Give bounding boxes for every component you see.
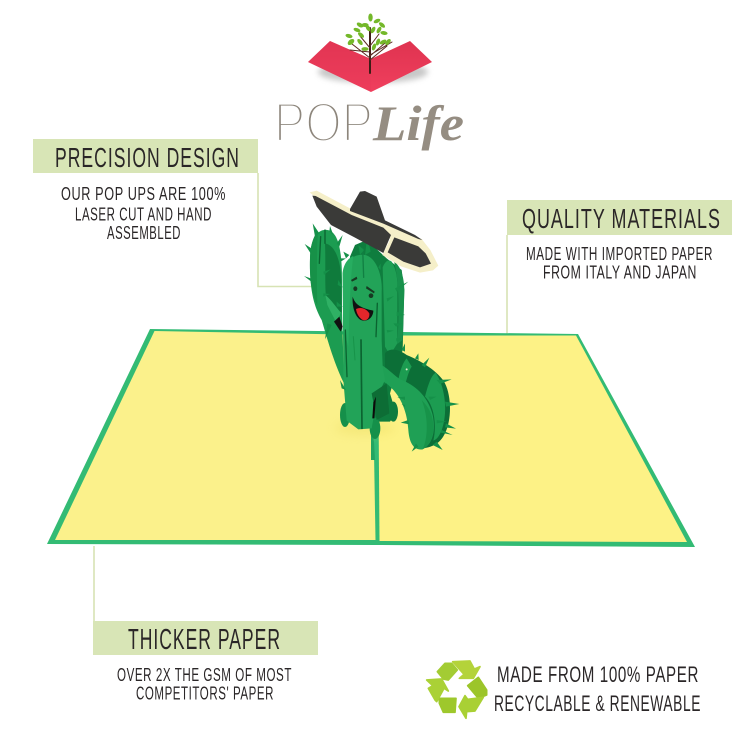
- icon: recycle symbol: [427, 661, 487, 718]
- description text: [117, 664, 292, 704]
- cactus feet: [340, 403, 350, 427]
- heading banner: THICKER PAPER: [128, 624, 281, 656]
- card green border: [47, 329, 695, 547]
- cactus: [304, 223, 459, 460]
- icon: open book with tree: [308, 14, 432, 92]
- illustration: cactus with sombrero: [304, 191, 459, 460]
- description text: [61, 183, 226, 243]
- cactus back body: [347, 240, 404, 422]
- cactus left arm: [310, 230, 344, 383]
- description text: ASSEMBLED: [107, 222, 181, 243]
- card left panel: [55, 331, 376, 540]
- cactus main body: [343, 255, 385, 429]
- heading banner: [33, 139, 258, 173]
- cactus mouth: [353, 297, 373, 321]
- callout leader lines: [94, 173, 507, 621]
- cactus spines: [304, 223, 459, 452]
- heading banner: [93, 621, 318, 656]
- description text: OUR POP UPS ARE 100%: [61, 183, 226, 204]
- panel: thicker paper: [93, 621, 318, 704]
- description text: [526, 243, 713, 282]
- sombrero: [310, 191, 438, 273]
- cactus right arm front: [380, 365, 434, 449]
- panel: quality materials: [507, 200, 732, 282]
- description text: COMPETITORS' PAPER: [136, 682, 274, 704]
- cactus face: [351, 277, 375, 321]
- description text: OVER 2X THE GSM OF MOST: [117, 664, 292, 685]
- wordmark: POP: POP: [274, 90, 373, 154]
- panel: recyclable: [427, 661, 701, 718]
- wordmark: Life: Life: [372, 95, 464, 151]
- cactus right arm back: [385, 350, 450, 448]
- card right panel: [378, 336, 687, 542]
- cactus slits: [319, 230, 377, 428]
- logo: Pop Life: [274, 14, 464, 154]
- open yellow card: [47, 329, 695, 547]
- heading banner: PRECISION DESIGN: [55, 142, 240, 173]
- description text: LASER CUT AND HAND: [75, 204, 212, 224]
- recycling text: [494, 662, 701, 716]
- panel: precision design: [33, 139, 258, 243]
